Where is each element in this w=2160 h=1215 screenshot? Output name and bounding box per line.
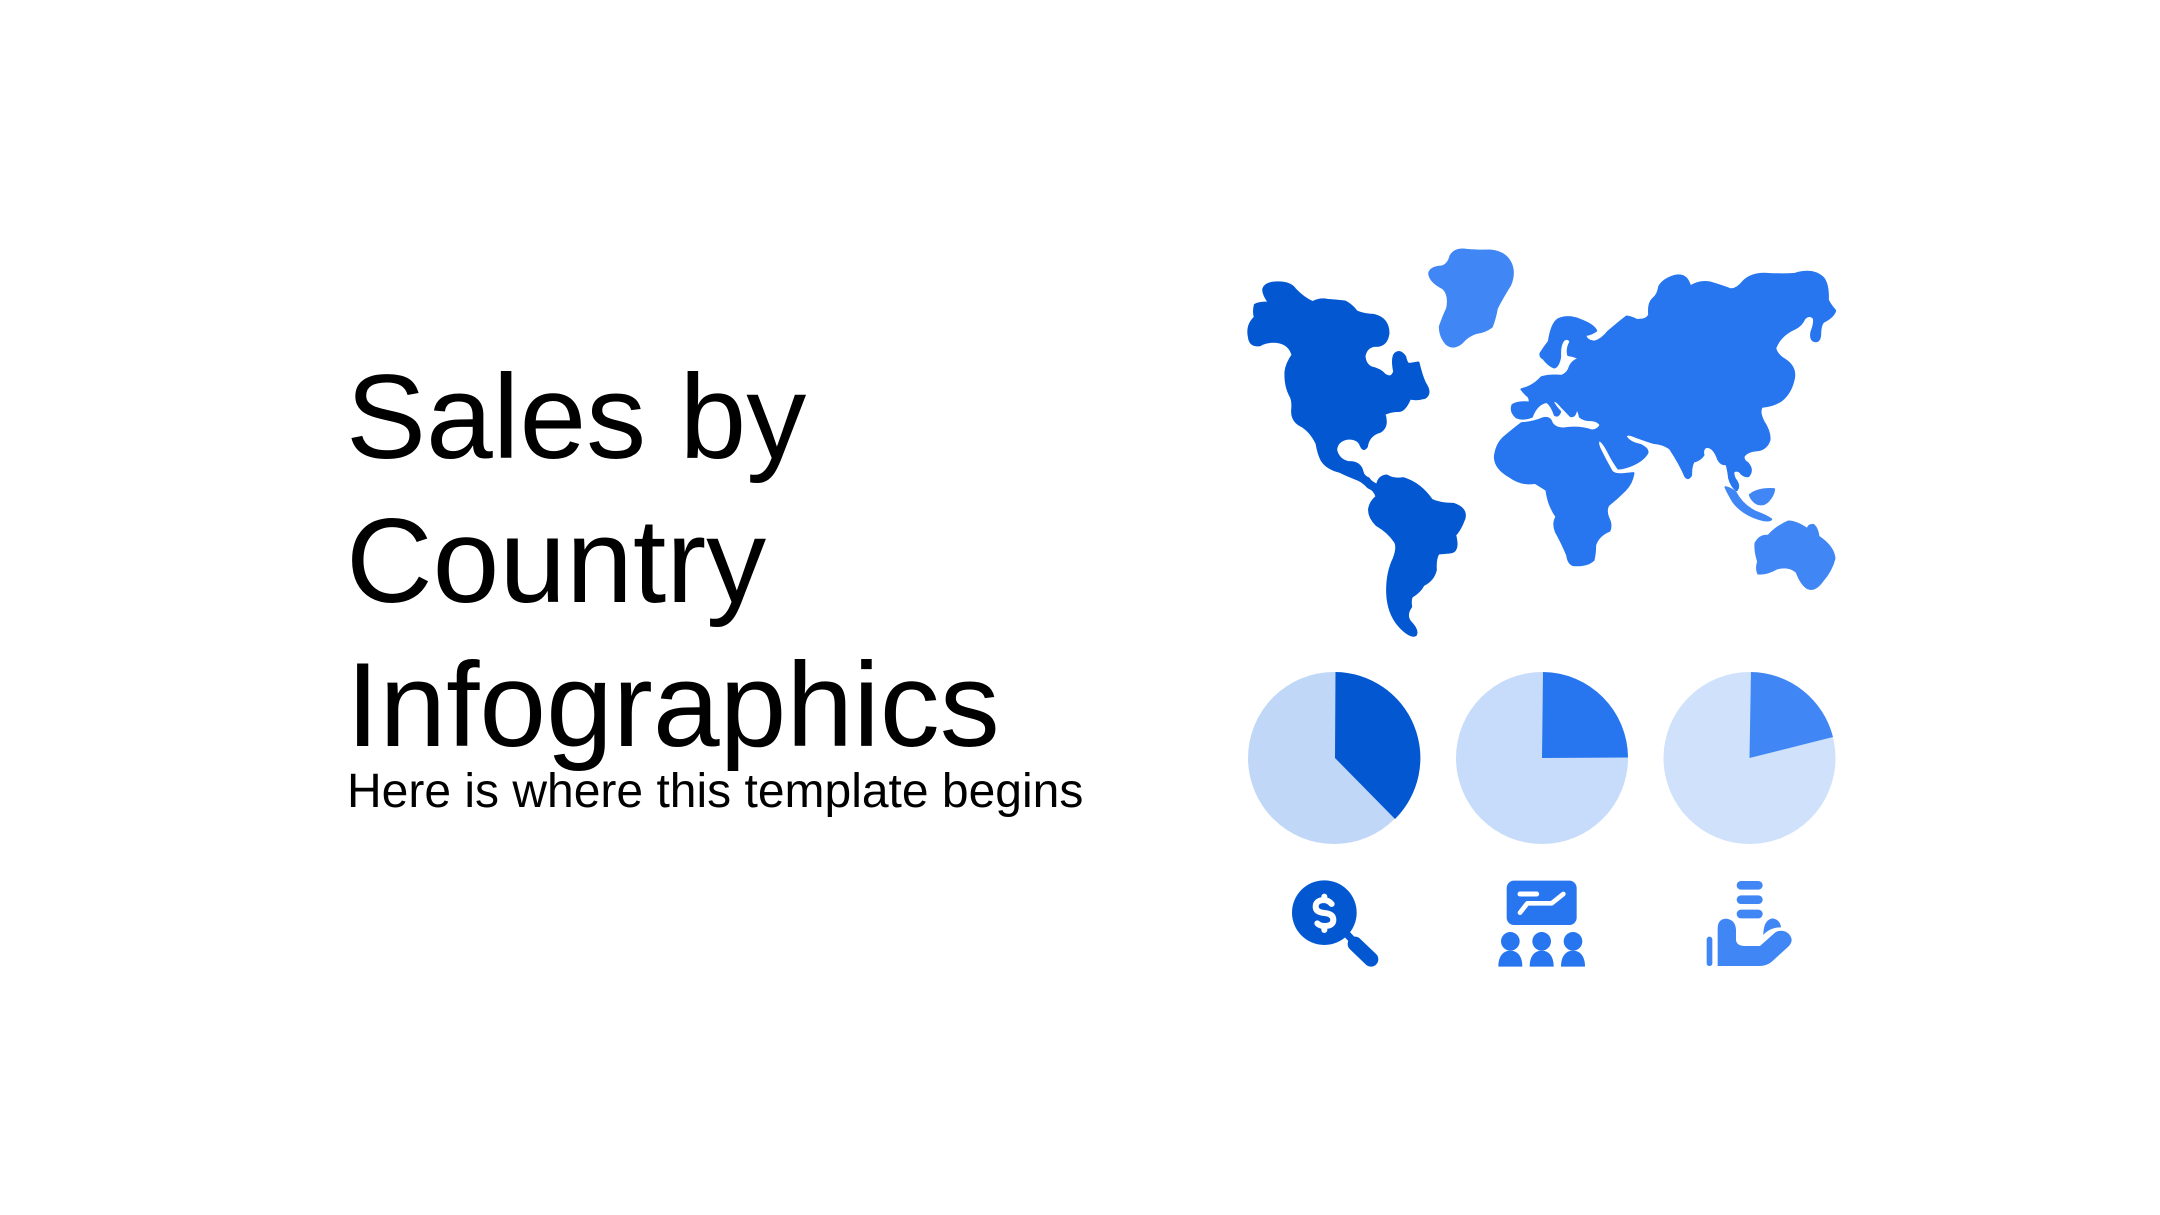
pie chart 3 bbox=[1664, 672, 1836, 844]
title: Infographics bbox=[346, 638, 1000, 772]
map: Australia and islands bbox=[1726, 487, 1834, 589]
subtitle: Here is where this template begins bbox=[347, 765, 1083, 818]
title: Sales by bbox=[346, 350, 806, 484]
icon: presentation with audience bbox=[1498, 881, 1585, 967]
icon: magnifier with dollar bbox=[1292, 880, 1371, 959]
pie chart 2 bbox=[1456, 672, 1628, 844]
title: Country bbox=[346, 494, 766, 628]
icon: hand holding coins bbox=[1707, 881, 1792, 966]
map: Greenland bbox=[1429, 250, 1513, 346]
map: the Americas bbox=[1248, 283, 1465, 636]
title bbox=[346, 350, 1000, 772]
world map bbox=[1248, 250, 1835, 636]
pie chart 1 bbox=[1248, 672, 1420, 844]
map: Eurasia and Africa bbox=[1495, 272, 1835, 565]
